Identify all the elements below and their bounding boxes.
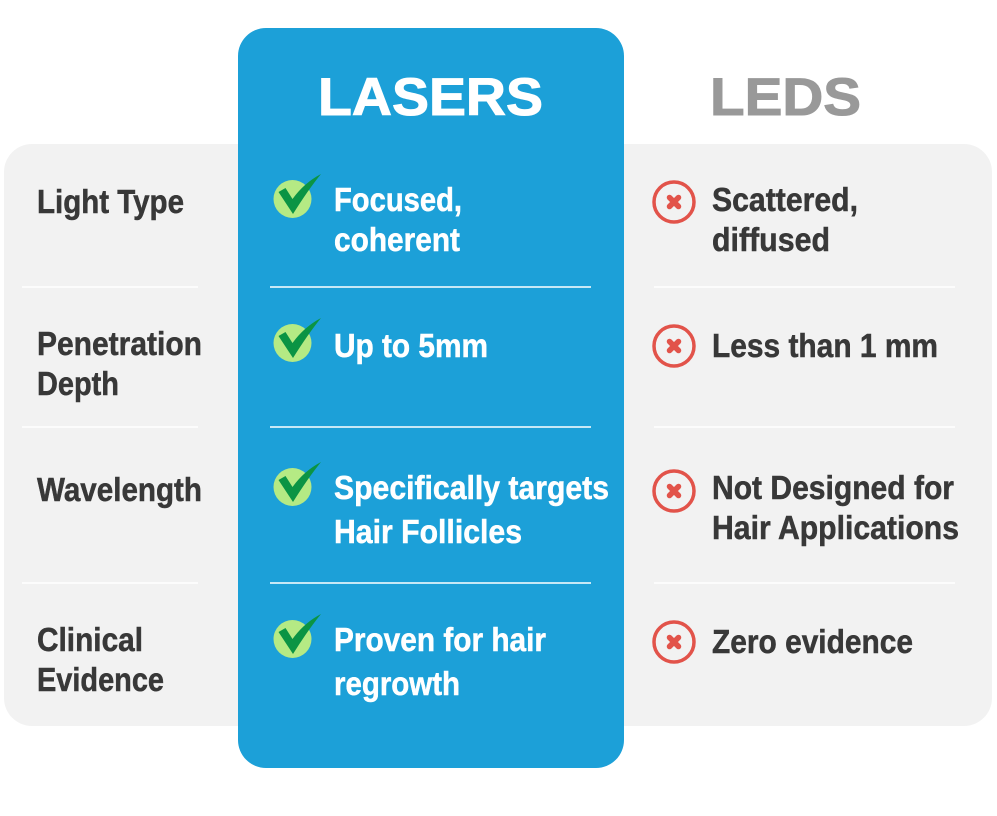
leds column text — [712, 181, 959, 660]
leds column text: Hair Applications — [712, 509, 959, 546]
lasers column text — [334, 181, 609, 702]
row labels: Penetration — [37, 325, 202, 362]
lasers column text: coherent — [334, 221, 460, 258]
row labels: Evidence — [37, 661, 164, 698]
icon: cross row 2 — [654, 326, 694, 366]
row dividers: grey panel — [22, 287, 955, 583]
icon: cross row 3 — [654, 471, 694, 511]
panel: lasers column — [238, 28, 624, 768]
row labels — [37, 183, 202, 698]
panel: grey comparison table background — [4, 144, 992, 726]
row labels: Wavelength — [37, 471, 202, 508]
icon: check row 2 — [274, 318, 321, 362]
lasers column text: Specifically targets — [334, 469, 609, 506]
leds column text: diffused — [712, 221, 830, 258]
heading: LEDS: LEDS — [710, 68, 861, 127]
lasers column text: Up to 5mm — [334, 327, 488, 364]
row labels: Light Type — [37, 183, 184, 220]
lasers column text: Focused, — [334, 181, 462, 218]
row dividers: lasers column — [270, 287, 591, 583]
icon: cross row 1 — [654, 182, 694, 222]
lasers column text: Hair Follicles — [334, 513, 522, 550]
icon: check row 4 — [274, 614, 321, 658]
icon: check row 1 — [274, 174, 321, 218]
heading: LASERS: LASERS — [318, 68, 543, 127]
leds column text: Less than 1 mm — [712, 327, 938, 364]
icon: cross row 4 — [654, 622, 694, 662]
icon: check row 3 — [274, 462, 321, 506]
leds column text: Zero evidence — [712, 623, 913, 660]
row labels: Depth — [37, 365, 119, 402]
leds column text: Not Designed for — [712, 469, 954, 506]
row labels: Clinical — [37, 621, 143, 658]
leds column text: Scattered, — [712, 181, 858, 218]
lasers column text: Proven for hair — [334, 621, 546, 658]
lasers column text: regrowth — [334, 665, 460, 702]
